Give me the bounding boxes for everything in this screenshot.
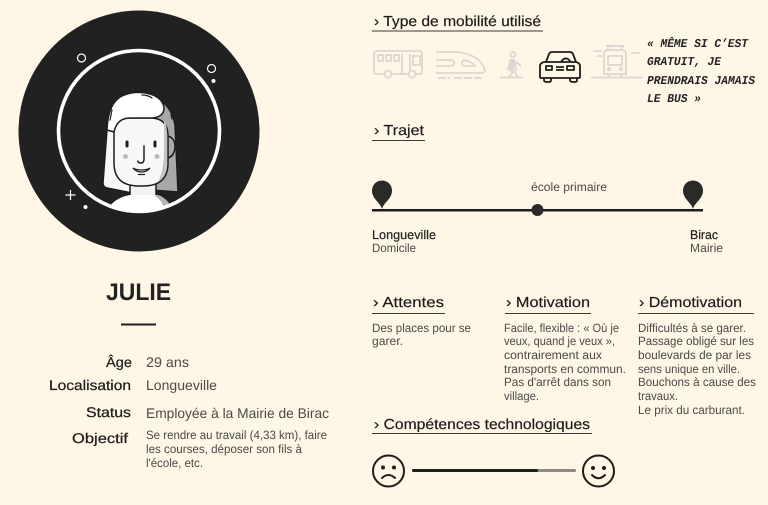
heading: trajet: › Trajet: [374, 123, 424, 139]
icon: sad face: [373, 456, 404, 486]
column: motivation: village.: [504, 389, 539, 403]
profile details: Se rendre au travail (4,33 km), faire: [146, 428, 327, 442]
column: motivation: Pas d'arrêt dans son: [504, 375, 611, 389]
column: motivation: veux, quand je veux »,: [504, 334, 615, 348]
icon: happy face: [583, 456, 614, 486]
label: école primaire: école primaire: [531, 180, 607, 194]
skill bar: [412, 469, 576, 472]
column: démotivation: sens unique en ville.: [638, 362, 740, 376]
quote: [647, 37, 756, 106]
icon: bus: [374, 51, 422, 78]
name: JULIE: [106, 279, 171, 306]
quote: « MÊME SI C’EST: [647, 37, 749, 51]
label: Longueville: Longueville: [372, 228, 436, 242]
column: démotivation: Bouchons à cause des: [638, 375, 756, 389]
label: Birac: [690, 228, 723, 255]
profile details: [49, 354, 329, 470]
icon: train: [436, 52, 485, 78]
column: attentes: › Attentes: [373, 295, 444, 311]
column: motivation: Facile, flexible : « Où je: [504, 321, 619, 335]
column: démotivation: Passage obligé sur les: [638, 334, 754, 348]
label: Longueville: Domicile: [372, 241, 416, 255]
label: Birac: Mairie: [690, 241, 723, 255]
profile details: Employée à la Mairie de Birac: [146, 405, 329, 421]
column: motivation: [504, 295, 626, 403]
quote: LE BUS »: [647, 92, 701, 106]
column: motivation: contrairement aux: [504, 348, 602, 362]
column: démotivation: Difficultés à se garer.: [638, 321, 746, 335]
pin: Birac: [683, 181, 703, 209]
profile details: l'école, etc.: [146, 456, 203, 470]
profile details: 29 ans: [146, 354, 189, 370]
profile details: Longueville: [146, 377, 217, 393]
label: Longueville: [372, 228, 436, 255]
column: démotivation: boulevards de par les: [638, 348, 751, 362]
name divider: [121, 324, 156, 326]
column: attentes: garer.: [372, 334, 403, 348]
stop marker: [532, 204, 544, 216]
column: attentes: Des places pour se: [372, 321, 471, 335]
profile details: les courses, déposer son fils à: [146, 442, 302, 456]
label: Birac: Birac: [690, 228, 718, 242]
portrait illustration: [18, 10, 260, 252]
profile details: Âge: [106, 354, 132, 370]
quote: GRATUIT, JE: [647, 55, 722, 69]
profile details: Status: [86, 404, 131, 420]
icon: car: [540, 52, 580, 82]
icon: tram: [591, 46, 643, 78]
profile details: Objectif: [72, 430, 128, 446]
column: démotivation: [638, 295, 756, 417]
icon: pedestrian: [500, 52, 523, 78]
column: motivation: › Motivation: [506, 295, 590, 311]
heading: type de mobilité: › Type de mobilité utilisé: [374, 14, 541, 30]
column: démotivation: travaux.: [638, 389, 678, 403]
pin: Longueville: [372, 181, 392, 209]
quote: PRENDRAIS JAMAIS: [647, 74, 756, 88]
column: démotivation: Le prix du carburant.: [638, 403, 745, 417]
column: motivation: transports en commun.: [504, 362, 626, 376]
heading: compétences technologiques: › Compétences technologiques: [374, 417, 590, 433]
column: démotivation: › Démotivation: [639, 295, 742, 311]
profile details: Localisation: [49, 377, 131, 393]
column: attentes: [372, 295, 471, 348]
route line: [372, 204, 703, 216]
